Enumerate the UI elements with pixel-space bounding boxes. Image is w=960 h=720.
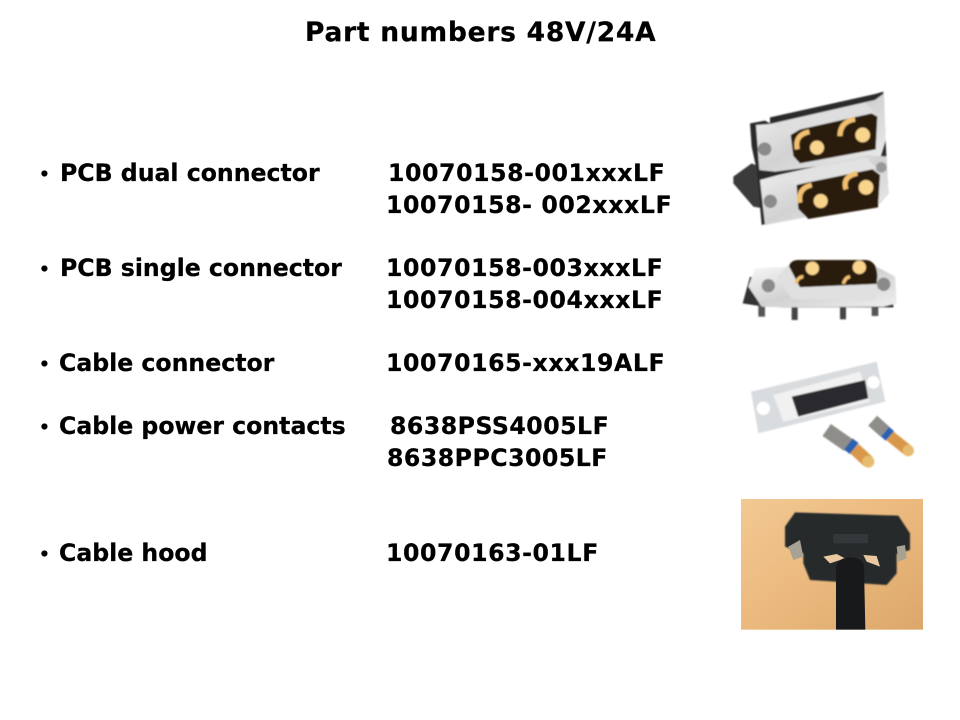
part number 10070165-xxx19ALF: 10070165-xxx19ALF (386, 349, 665, 377)
photo: cable hood (741, 499, 923, 630)
parts list (39, 159, 672, 567)
icon: cable connector and contacts (751, 362, 914, 468)
bullet: Cable hood: • (39, 545, 50, 565)
bullet: Cable power contacts: Cable power contacts (59, 412, 346, 440)
icon: contact pin right (873, 421, 914, 456)
pins: upper shell (797, 119, 855, 149)
bullet: PCB dual connector: PCB dual connector (60, 159, 320, 187)
part number 10070158-003xxxLF: 10070158-003xxxLF (386, 254, 663, 282)
part number 10070158-002xxxLF: 10070158- 002xxxLF (386, 191, 672, 219)
part number 10070163-01LF: 10070163-01LF (386, 539, 599, 567)
part number 10070158-001xxxLF: 10070158-001xxxLF (388, 159, 665, 187)
bullet: PCB single connector: PCB single connector (60, 254, 342, 282)
bullet: Cable hood: Cable hood (59, 539, 208, 567)
bullet: PCB single connector: • (39, 260, 50, 280)
part number 8638PPC3005LF: 8638PPC3005LF (387, 444, 608, 472)
title: Part numbers 48V/24A (305, 17, 656, 48)
bullet: PCB dual connector: • (39, 165, 50, 185)
bullet: Cable connector: Cable connector (59, 349, 274, 377)
pins: lower shell (800, 173, 857, 203)
part number 8638PSS4005LF: 8638PSS4005LF (390, 412, 609, 440)
icon: dual PCB connector (733, 92, 888, 225)
bullet: Cable connector: • (39, 355, 50, 375)
product images (732, 90, 923, 630)
bullet: Cable power contacts: • (39, 418, 50, 438)
icon: single PCB connector (743, 260, 897, 320)
part number 10070158-004xxxLF: 10070158-004xxxLF (386, 286, 663, 314)
icon: contact pin left (827, 430, 874, 468)
